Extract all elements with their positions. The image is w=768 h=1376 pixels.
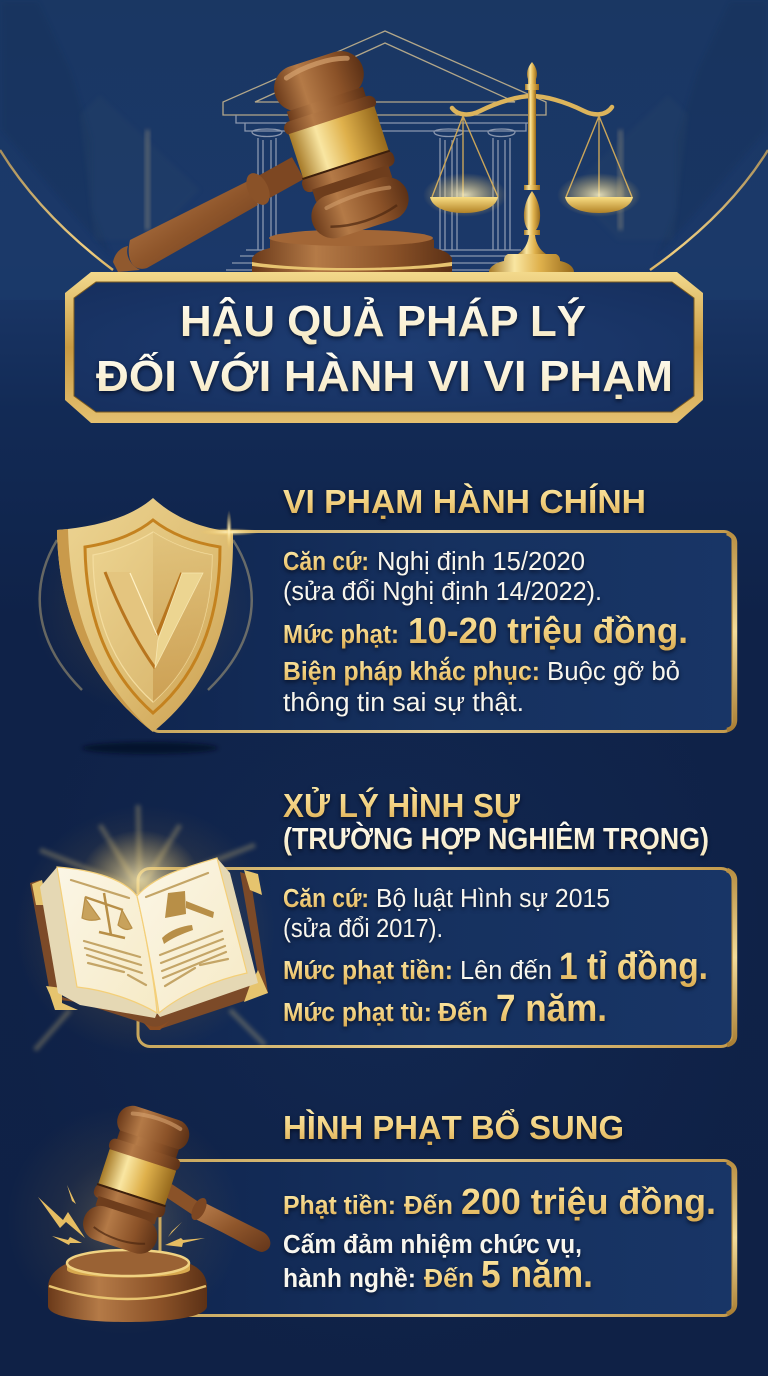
text: additional penalty details: Cấm đảm nhiệm chức vụ, [283,1231,582,1259]
text: administrative details: 10-20 triệu đồng. [408,610,688,651]
text: criminal details: 1 tỉ đồng. [559,946,708,988]
text: additional penalty details: 5 năm. [481,1254,593,1296]
icon: courthouse outline [223,31,546,270]
icon: mini gavel on page [162,891,214,944]
text: additional penalty details [283,1181,716,1296]
icon: mini scale on page [82,893,132,938]
text: criminal details [283,885,708,1030]
title text: HẬU QUẢ PHÁP LÝ [180,296,586,346]
text: additional penalty details: Đến [404,1192,453,1220]
title text [96,296,673,401]
icon: main gavel [113,44,452,272]
text: additional penalty details: Phạt tiền: [283,1192,396,1220]
heading: xử lý hình sự: XỬ LÝ HÌNH SỰ [283,787,521,824]
text: administrative details: Mức phạt: [283,621,399,649]
panel: criminal details [138,868,735,1046]
heading: hình phạt bổ sung: HÌNH PHẠT BỔ SUNG [283,1109,624,1146]
text: criminal details: Lên đến [460,957,552,985]
panel: administrative details [150,532,735,732]
text: administrative details: Nghị định 15/2020 [377,548,585,576]
text: administrative details: (sửa đổi Nghị định 14/2022). [283,578,602,606]
text: administrative details: Biện pháp khắc phục: [283,656,540,686]
text: administrative details: Buộc gỡ bỏ [547,658,680,686]
text: criminal details: (sửa đổi 2017). [283,915,443,943]
icon: scales of justice [423,62,641,272]
title text: ĐỐI VỚI HÀNH VI VI PHẠM [96,350,673,401]
heading: xử lý hình sự [283,787,709,856]
section: criminal handling [15,787,735,1055]
text: criminal details: Mức phạt tiền: [283,957,453,985]
text: administrative details [283,548,688,717]
panel: additional penalty details [160,1160,735,1316]
text: criminal details: Mức phạt tù: [283,999,432,1027]
text: criminal details: Căn cứ: [283,885,369,913]
book cover [30,872,268,1030]
title banner [65,272,703,423]
section: additional penalties [7,1102,735,1335]
heading: vi phạm hành chính: VI PHẠM HÀNH CHÍNH [283,483,646,520]
icon: lightning sparks [38,1185,205,1247]
icon: gavel and sound block [7,1102,270,1335]
text: criminal details: 7 năm. [496,988,607,1030]
text: criminal details: Đến [438,999,488,1027]
heading: xử lý hình sự: (TRƯỜNG HỢP NGHIÊM TRỌNG) [283,820,709,856]
text: additional penalty details: Đến [424,1265,474,1293]
text: additional penalty details: 200 triệu đồng. [461,1181,716,1222]
icon: gold shield [33,498,260,754]
text: additional penalty details: hành nghề: [283,1265,416,1293]
section: administrative violation [33,483,735,754]
text: criminal details: Bộ luật Hình sự 2015 [376,885,610,913]
icon: open law book [15,805,275,1055]
book pages [40,867,157,1018]
text: administrative details: thông tin sai sự thật. [283,689,524,717]
text: administrative details: Căn cứ: [283,548,369,576]
